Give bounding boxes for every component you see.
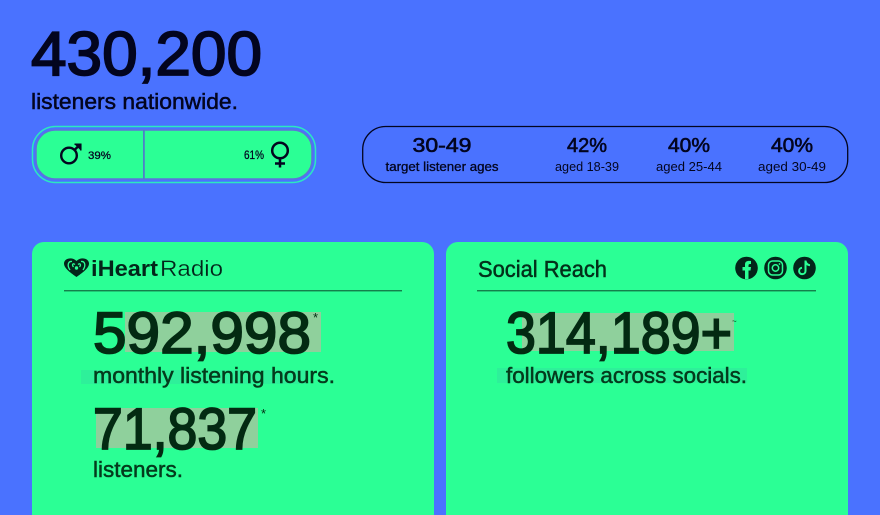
icon: female symbol (272, 143, 288, 168)
stat: monthly listening hours: monthly listening hours. (93, 363, 335, 388)
title: total listeners: listeners nationwide. (31, 89, 238, 114)
stat: aged 18-39: aged 18-39 (555, 160, 619, 174)
icon: male symbol (61, 144, 81, 163)
stat: aged 25-44: aged 25-44 (656, 160, 722, 174)
icon: tiktok (793, 257, 816, 279)
stat: listeners: 71,837 (93, 397, 257, 462)
stat: aged 18-39 (555, 135, 619, 174)
heading: iHeartRadio wordmark: Radio (160, 256, 223, 281)
icon: facebook (735, 257, 758, 279)
stat: followers: followers across socials. (506, 363, 747, 388)
panel: gender split (32, 126, 316, 182)
stat: aged 25-44: 40% (668, 135, 710, 157)
text: female share: 61% (244, 150, 264, 162)
stat: target ages: target listener ages (386, 160, 498, 174)
icon: instagram (764, 257, 787, 279)
panel: listener ages (363, 126, 848, 182)
stat: listeners: listeners. (93, 457, 183, 482)
icon: iHeart logo (64, 258, 89, 277)
stat: followers: ~ (732, 317, 737, 326)
stat: target ages: 30-49 (412, 135, 472, 157)
stat: monthly listening hours: 592,998 (93, 301, 311, 366)
stat: monthly listening hours: * (313, 310, 318, 325)
heading: iHeartRadio wordmark (91, 256, 223, 281)
heading: social reach: Social Reach (478, 256, 607, 282)
stat: aged 30-49: 40% (771, 135, 813, 157)
stat: target ages (386, 135, 498, 174)
title: total listeners: 430,200 (31, 20, 262, 89)
text: male share: 39% (88, 150, 111, 162)
stat: listeners: * (261, 406, 266, 421)
panel: iHeartRadio (32, 242, 434, 515)
stat: followers: 314,189+ (506, 301, 732, 366)
stat: aged 18-39: 42% (567, 135, 607, 157)
stat: aged 30-49: aged 30-49 (758, 160, 826, 174)
stat: monthly listening hours (81, 301, 335, 388)
panel: social reach (446, 242, 848, 515)
stat: aged 25-44 (656, 135, 722, 174)
stat: aged 30-49 (758, 135, 826, 174)
heading: iHeartRadio wordmark: iHeart (91, 256, 159, 281)
